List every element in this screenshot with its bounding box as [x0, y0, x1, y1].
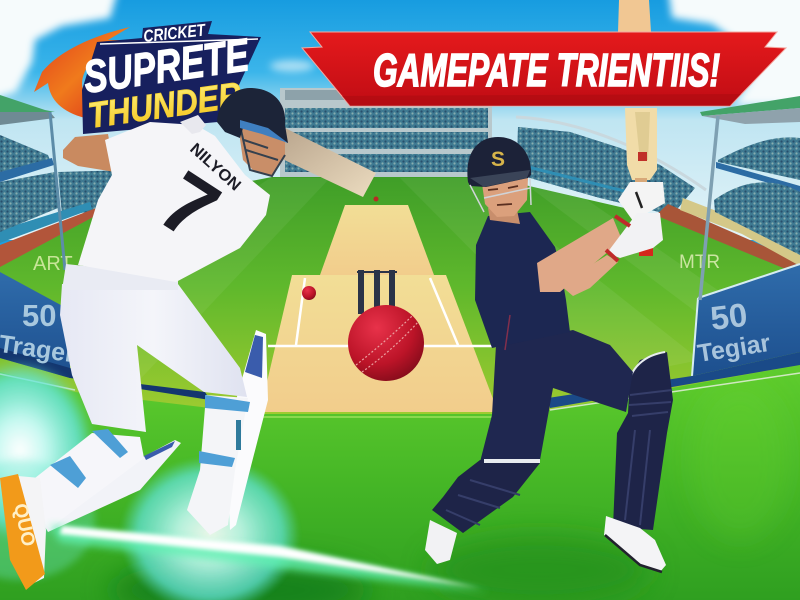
shirt trim: [505, 315, 510, 350]
right shoe: [604, 516, 666, 572]
left arm: [63, 134, 115, 172]
rear pad: [44, 440, 181, 532]
pitch edge line: [262, 416, 500, 418]
boundary track: right: [655, 204, 800, 275]
left stand structure: [0, 95, 65, 270]
logo: SUPRETE: SUPRETE: [80, 28, 253, 103]
helmet grille: [470, 178, 531, 212]
green glow flare: lower left disc: [0, 460, 95, 580]
bat blade: [625, 108, 657, 256]
shirt number: 7: [143, 153, 235, 260]
helmet badge: S: [491, 148, 505, 171]
gloves: [606, 182, 665, 261]
rear shin: [35, 433, 144, 528]
sky: [0, 0, 800, 240]
red banner: [302, 32, 786, 106]
right sign panel: Tegiar: [696, 329, 772, 368]
batter right: navy kit: [425, 108, 673, 572]
shoe sole: [0, 474, 45, 590]
small ball distant: [374, 196, 378, 202]
right sign panel: [548, 264, 800, 410]
face: [238, 125, 285, 176]
neck: [488, 208, 520, 224]
bat: top tip behind banner: [618, 0, 651, 32]
grandstand: left low: [58, 170, 132, 215]
green glow flare: bottom: [120, 457, 300, 600]
field label left: ART: [33, 253, 73, 275]
front pad: [226, 330, 268, 530]
left sign panel: [0, 272, 210, 400]
batter left: white kit: [0, 88, 376, 590]
front shin: [187, 395, 248, 535]
trousers: [480, 330, 633, 462]
right sign panel: 50: [708, 296, 749, 337]
logo: [34, 20, 261, 136]
logo: THUNDER: THUNDER: [85, 74, 244, 136]
wickets: [357, 270, 397, 314]
light streak: [50, 525, 490, 592]
waistband: [62, 264, 178, 290]
lawn shading: [110, 380, 790, 600]
front leg pad: [432, 460, 540, 533]
green glow flare: left: [0, 360, 95, 540]
grandstand: right curve: [516, 117, 706, 215]
front pad straps: [199, 395, 250, 467]
logo: CRICKET: CRICKET: [142, 20, 207, 46]
helmet: [217, 88, 288, 143]
logo shield: [82, 21, 261, 134]
grandstand: centre: [280, 88, 492, 180]
mowing stripes: [30, 178, 790, 390]
outfield grass: [0, 177, 800, 420]
back leg pad: [613, 352, 673, 530]
bat: [278, 127, 376, 197]
face: [482, 178, 528, 217]
arms: [537, 218, 622, 296]
rear pad straps: [50, 429, 128, 488]
shirt: [475, 212, 570, 348]
eyes and mouth: [488, 186, 518, 205]
pitch: [260, 205, 498, 412]
advert boards: [0, 198, 800, 266]
shirt name: NILYON: [186, 140, 244, 194]
left sign panel: 50: [22, 298, 56, 333]
small red ball: [302, 286, 316, 300]
field label right: MTR: [679, 252, 720, 273]
foreground grass: [0, 365, 800, 600]
clouds: [0, 0, 800, 105]
helmet grille: [241, 130, 285, 176]
match ball: [348, 305, 424, 381]
right stand structure: [700, 96, 800, 300]
top glove: [180, 115, 206, 134]
logo flame: [34, 27, 130, 118]
trousers: [60, 284, 247, 432]
shoe sole: QUO: [9, 502, 39, 548]
shoe: [18, 476, 46, 585]
left shoe: [425, 520, 457, 564]
helmet: [467, 137, 531, 187]
boundary track: left: [0, 202, 112, 268]
shirt: [78, 122, 270, 282]
